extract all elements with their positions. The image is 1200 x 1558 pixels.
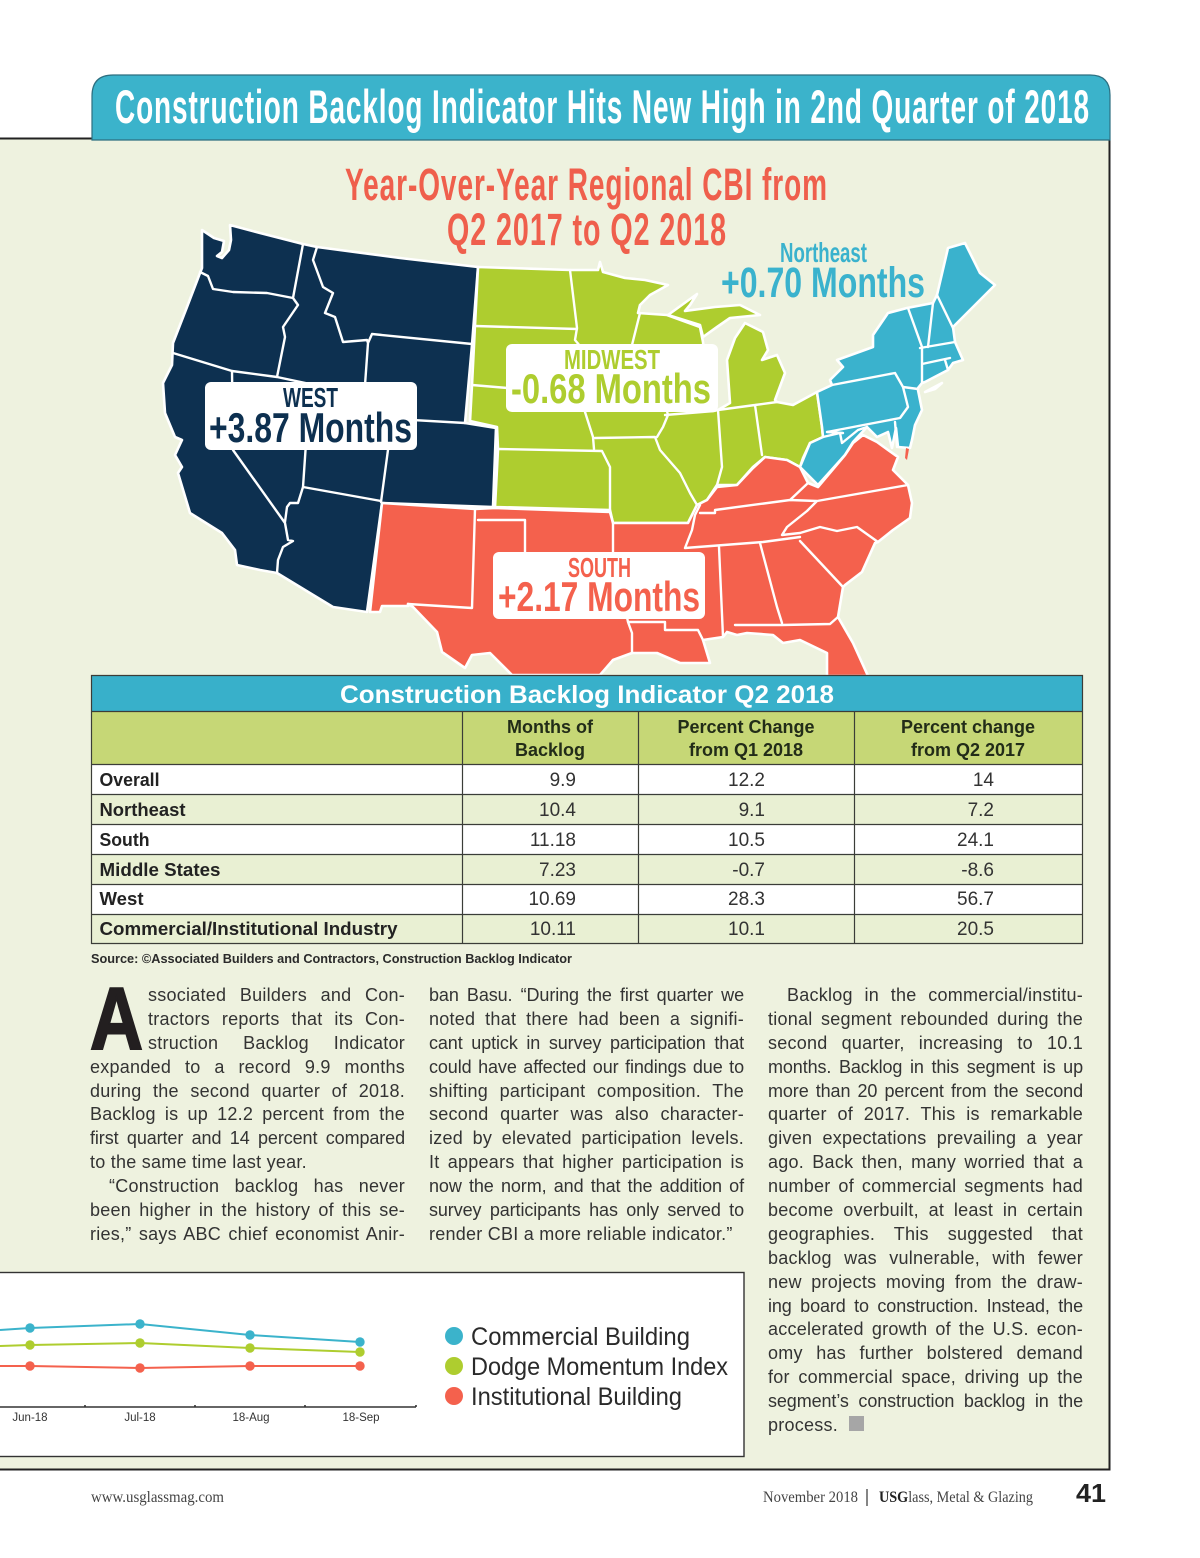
article text: column 3: omy has further bolstered demand xyxy=(768,1343,1083,1363)
article text: column 3 xyxy=(768,985,1083,1435)
table: Construction Backlog Indicator Q2 2018: 10.1 xyxy=(728,919,765,940)
callout: midwest xyxy=(506,344,718,412)
article text: column 2: could have affected our findings due to xyxy=(429,1057,744,1077)
article text: column 1: “Construction backlog has never xyxy=(109,1176,405,1196)
article text: column 3: more than 20 percent from the second xyxy=(768,1081,1083,1101)
article text: column 3: new projects moving from the draw- xyxy=(768,1272,1083,1292)
table: Construction Backlog Indicator Q2 2018: from Q1 2018 xyxy=(689,740,803,760)
table: Construction Backlog Indicator Q2 2018: Percent change xyxy=(901,717,1035,737)
callout: west: WEST xyxy=(283,382,338,413)
article text: column 2: noted that there had been a signifi- xyxy=(429,1009,744,1029)
article text: column 1: first quarter and 14 percent compared xyxy=(90,1128,405,1148)
table: Construction Backlog Indicator Q2 2018: 7.2 xyxy=(968,800,994,821)
article text: column 2: cant uptick in survey participation that xyxy=(429,1033,744,1053)
article text: column 3: ago. Back then, many worried that a xyxy=(768,1152,1083,1172)
table: Construction Backlog Indicator Q2 2018: 9.1 xyxy=(739,800,765,821)
article text: column 3: for commercial space, driving up the xyxy=(768,1367,1083,1387)
article text: column 1: during the second quarter of 2018. xyxy=(90,1081,405,1101)
footer: www.usglassmag.com xyxy=(91,1489,224,1506)
callout: south: SOUTH xyxy=(568,552,631,583)
table: Construction Backlog Indicator Q2 2018: 7.23 xyxy=(539,860,576,881)
callout: northeast: +0.70 Months xyxy=(721,259,925,307)
callout: midwest: -0.68 Months xyxy=(511,365,711,412)
article text: column 3: given expectations prevailing a year xyxy=(768,1128,1083,1148)
table source note: Source: ©Associated Builders and Contractors, Construction Backlog Indicator xyxy=(91,952,572,966)
article text: column 1: ssociated Builders and Con- xyxy=(148,985,405,1005)
callout: south: +2.17 Months xyxy=(498,573,700,620)
article text: column 3: ing board to construction. Instead, the xyxy=(768,1296,1083,1316)
article text: column 1: tractors reports that its Con- xyxy=(148,1009,405,1029)
table: Construction Backlog Indicator Q2 2018: 10.4 xyxy=(539,800,576,821)
table: Construction Backlog Indicator Q2 2018 xyxy=(92,676,1082,944)
article text: column 2 xyxy=(429,985,744,1244)
table: Construction Backlog Indicator Q2 2018: Overall xyxy=(100,770,160,790)
article text: column 1 xyxy=(90,985,405,1244)
callout: midwest: MIDWEST xyxy=(564,344,660,375)
article text: column 3: second quarter, increasing to 10.1 xyxy=(768,1033,1083,1053)
article text: column 1: ries,” says ABC chief economist Anir- xyxy=(90,1224,405,1244)
table: Construction Backlog Indicator Q2 2018: 28.3 xyxy=(728,889,765,910)
article text: column 1: struction Backlog Indicator xyxy=(148,1033,405,1053)
chart legend: Dodge Momentum Index xyxy=(471,1353,728,1381)
chart legend: Institutional Building xyxy=(471,1383,682,1411)
footer xyxy=(91,1478,1106,1508)
map heading xyxy=(345,159,828,255)
article text: column 3: months. Backlog in this segment is up xyxy=(768,1057,1083,1077)
article text: column 2: second quarter was also character- xyxy=(429,1104,744,1124)
table: Construction Backlog Indicator Q2 2018: 10.5 xyxy=(728,830,765,851)
callout: west xyxy=(205,382,417,451)
article text: column 2: render CBI a more reliable indicator.” xyxy=(429,1224,733,1244)
chart legend: Commercial Building xyxy=(471,1323,690,1351)
table: Construction Backlog Indicator Q2 2018: Percent Change xyxy=(677,717,815,737)
chart axis: 18-Sep xyxy=(342,1412,380,1424)
article text: column 2: ban Basu. “During the first quarter we xyxy=(429,985,744,1005)
table: Construction Backlog Indicator Q2 2018: 11.18 xyxy=(530,830,576,851)
table: Construction Backlog Indicator Q2 2018: 56.7 xyxy=(957,889,994,910)
chart legend xyxy=(445,1323,728,1411)
panel: chart xyxy=(0,1272,744,1456)
table: Construction Backlog Indicator Q2 2018: Backlog xyxy=(515,740,585,760)
chart axis: 18-Aug xyxy=(232,1412,270,1424)
article text: column 1: expanded to a record 9.9 months xyxy=(90,1057,405,1077)
article text: column 2: ized by elevated participation levels. xyxy=(429,1128,744,1148)
callout: northeast xyxy=(721,237,925,307)
table: Construction Backlog Indicator Q2 2018: 20.5 xyxy=(957,919,994,940)
series: commercial building xyxy=(0,1319,365,1347)
article text: column 3: segment’s construction backlog in the xyxy=(768,1391,1083,1411)
table: Construction Backlog Indicator Q2 2018: South xyxy=(100,830,150,850)
article text: column 3: geographies. This suggested that xyxy=(768,1224,1083,1244)
article text: column 1: Backlog is up 12.2 percent from the xyxy=(90,1104,405,1124)
callout: northeast: Northeast xyxy=(780,237,867,268)
map: United States by region xyxy=(163,225,995,676)
table: Construction Backlog Indicator Q2 2018: Months of xyxy=(507,717,594,737)
table: Construction Backlog Indicator Q2 2018: -8.6 xyxy=(961,860,994,881)
table: Construction Backlog Indicator Q2 2018: 9.9 xyxy=(550,770,576,791)
callout: south xyxy=(493,552,705,620)
chart axis: Jul-18 xyxy=(124,1412,156,1424)
table: Construction Backlog Indicator Q2 2018: 10.11 xyxy=(530,919,576,940)
series: dodge momentum index xyxy=(0,1338,365,1357)
article text: column 3: tional segment rebounded during the xyxy=(768,1009,1083,1029)
table: Construction Backlog Indicator Q2 2018: West xyxy=(100,889,144,909)
table: Construction Backlog Indicator Q2 2018: 10.69 xyxy=(528,889,576,910)
panel: page background xyxy=(0,138,1110,1470)
article text: column 1: been higher in the history of this se- xyxy=(90,1200,405,1220)
region: northeast xyxy=(800,243,995,485)
article text: column 3: number of commercial segments had xyxy=(768,1176,1083,1196)
table: Construction Backlog Indicator Q2 2018: from Q2 2017 xyxy=(911,740,1025,760)
article text: column 2: survey participants has only served to xyxy=(429,1200,744,1220)
article text: column 1: to the same time last year. xyxy=(90,1152,307,1172)
callout: west: +3.87 Months xyxy=(209,404,412,451)
table: Construction Backlog Indicator Q2 2018: -0.7 xyxy=(732,860,765,881)
article text: column 3: quarter of 2017. This is remarkable xyxy=(768,1104,1083,1124)
drop cap A: A xyxy=(90,969,143,1068)
table: Construction Backlog Indicator Q2 2018: 12.2 xyxy=(728,770,765,791)
table: Construction Backlog Indicator Q2 2018: 24.1 xyxy=(957,830,994,851)
table: Construction Backlog Indicator Q2 2018: Commercial/Institutional Industry xyxy=(100,919,398,939)
footer: 41 xyxy=(1076,1478,1106,1508)
article text: column 2: It appears that higher participation is xyxy=(429,1152,744,1172)
chart axis xyxy=(0,1405,416,1424)
table: Construction Backlog Indicator Q2 2018: Construction Backlog Indicator Q2 2018 xyxy=(340,681,834,709)
region: west xyxy=(163,225,496,612)
article text: column 3: become overbuilt, at least in certain xyxy=(768,1200,1083,1220)
article text: column 3: process. xyxy=(768,1415,838,1435)
footer: USGlass, Metal & Glazing xyxy=(879,1489,1033,1506)
article text: column 2: shifting participant composition. The xyxy=(429,1081,744,1101)
series: institutional building xyxy=(0,1361,365,1373)
article text: column 3: Backlog in the commercial/institu- xyxy=(787,985,1083,1005)
map heading: Q2 2017 to Q2 2018 xyxy=(447,204,727,255)
footer: November 2018 xyxy=(763,1489,858,1506)
map heading: Year-Over-Year Regional CBI from xyxy=(345,159,828,210)
end mark xyxy=(849,1416,864,1431)
table: Construction Backlog Indicator Q2 2018: Middle States xyxy=(100,860,220,880)
region: south xyxy=(370,435,912,676)
region: midwest xyxy=(470,262,823,523)
article text: column 2: now the norm, and that the addition of xyxy=(429,1176,744,1196)
table: Construction Backlog Indicator Q2 2018: 14 xyxy=(973,770,994,791)
table: Construction Backlog Indicator Q2 2018: Northeast xyxy=(100,800,186,820)
article text: column 3: accelerated growth of the U.S. econ- xyxy=(768,1319,1083,1339)
article text: column 3: backlog was vulnerable, with fewer xyxy=(768,1248,1083,1268)
chart axis: Jun-18 xyxy=(12,1412,48,1424)
